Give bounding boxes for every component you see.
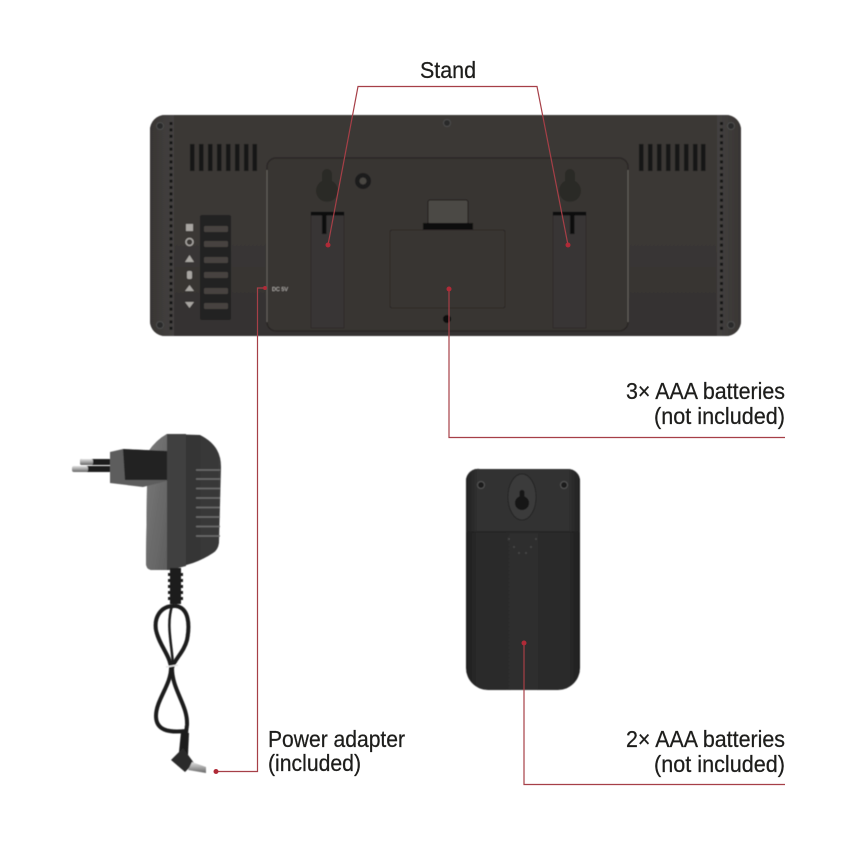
strain relief	[168, 568, 183, 604]
left side strip	[150, 115, 174, 336]
centre vent screw	[355, 173, 371, 189]
callout: sensor batteries	[522, 640, 785, 784]
stand leader lines	[328, 86, 568, 245]
sensor batteries note: (not included)	[654, 751, 785, 777]
adapter note: (included)	[268, 750, 361, 776]
callout: power adapter	[214, 286, 405, 776]
sensor body	[466, 469, 580, 690]
sensor perforation	[508, 538, 537, 554]
left vents	[190, 144, 257, 171]
plug dark face	[123, 449, 167, 480]
left keyhole	[316, 169, 338, 202]
stand panel	[267, 158, 628, 331]
right side strip	[717, 115, 741, 336]
adapter label: Power adapter	[268, 726, 405, 752]
plug pins	[72, 459, 124, 472]
keyhole	[515, 490, 529, 510]
band seam	[466, 531, 580, 533]
right keyhole	[559, 169, 581, 202]
device rear view	[150, 115, 741, 336]
adapter ribs	[196, 470, 220, 536]
adapter markers	[214, 286, 267, 774]
right vents	[639, 144, 706, 171]
adapter side face	[146, 434, 168, 570]
sensor batteries marker	[522, 640, 526, 646]
sensor batteries leader	[524, 643, 785, 784]
stand markers	[326, 242, 570, 248]
jack strain relief	[179, 732, 189, 755]
buttons	[204, 226, 228, 309]
sensor batteries label: 2× AAA batteries	[626, 726, 785, 752]
plug base	[110, 449, 167, 487]
remote sensor	[466, 469, 580, 690]
callout: device batteries	[446, 286, 785, 438]
left stand foot	[311, 212, 344, 328]
device body	[150, 115, 741, 336]
adapter leader	[216, 288, 265, 772]
power socket label: DC 5V	[272, 287, 289, 293]
jack tip	[188, 762, 206, 773]
jack body	[171, 748, 194, 772]
sensor top band	[466, 469, 580, 532]
device batteries note: (not included)	[654, 403, 785, 429]
adapter front band	[167, 434, 186, 570]
corner screws	[156, 120, 734, 328]
stand tab	[423, 200, 473, 230]
cord	[156, 606, 188, 740]
button panel	[200, 215, 231, 320]
adapter body	[146, 434, 221, 570]
button icons	[185, 224, 194, 308]
callout: stand	[326, 57, 570, 248]
hanging recess	[508, 474, 536, 520]
cover hole	[443, 315, 451, 323]
right perforation	[720, 122, 723, 330]
device batteries marker	[446, 286, 452, 292]
device batteries leader	[449, 289, 785, 438]
cord tie	[166, 665, 178, 667]
panel highlight edges	[267, 170, 628, 322]
right stand foot	[553, 212, 586, 328]
stand label: Stand	[420, 57, 476, 83]
adapter	[72, 434, 221, 773]
sensor screws	[478, 482, 568, 488]
device batteries label: 3× AAA batteries	[626, 378, 785, 404]
battery cover	[390, 230, 505, 308]
left perforation	[170, 122, 172, 330]
